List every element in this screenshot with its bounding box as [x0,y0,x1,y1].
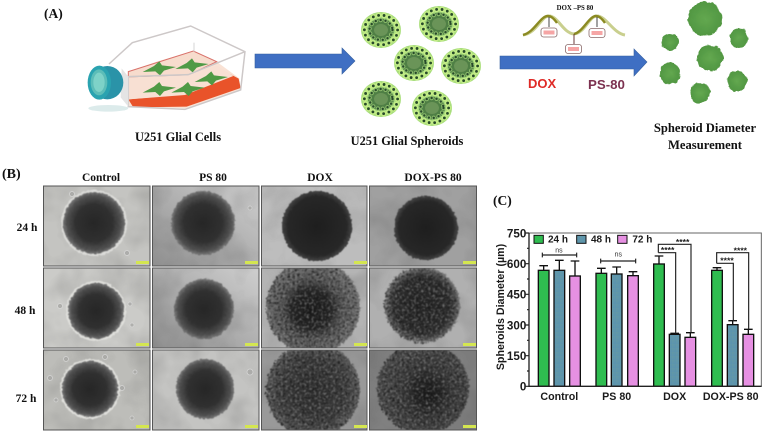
significance brackets [542,244,749,333]
error bars [539,256,753,337]
bars: 72 h [570,276,754,386]
column headers: DOX [307,172,333,184]
floating cells [48,192,253,420]
significance labels: **** [734,245,748,255]
column headers: Control [82,172,120,184]
y tick labels [507,227,526,394]
diagram: DOX-PS 80 conjugate [523,5,625,54]
y tick labels: 150 [507,350,526,363]
row headers: 72 h [16,393,37,405]
label: B: (B) [2,167,21,182]
row 48 h [66,279,234,341]
significance labels: ns [555,248,563,255]
y tick labels: 300 [507,319,526,332]
y tick labels: 750 [507,227,526,240]
significance labels: **** [720,256,734,266]
micrograph backgrounds [44,186,477,430]
column headers [82,172,462,184]
y tick labels: 450 [507,289,526,302]
caption: Spheroid Diameter Measurement: Spheroid Diameter [654,121,757,135]
significance labels: **** [676,237,690,247]
column headers: PS 80 [199,172,227,184]
bars: 24 h [538,264,722,386]
arrow: cells to spheroids [255,48,355,74]
panel: C bar chart [493,193,762,403]
arrow: treatment [500,49,647,76]
icon: measured spheroids [660,2,748,103]
panel: B micrographs [2,167,477,432]
plot frame [529,233,761,386]
diagram: DOX-PS 80 conjugate: DOX –PS 80 [557,5,594,12]
row headers: 48 h [15,305,36,317]
y ticks [526,233,529,386]
row headers: 24 h [17,222,38,234]
significance labels [555,237,748,266]
caption: Spheroid Diameter Measurement: Measurement [668,138,743,152]
row headers [15,222,38,405]
panel: A workflow [44,2,757,152]
x labels: PS 80 [602,391,631,403]
x labels: Control [540,391,578,403]
label: PS-80: PS-80 [588,77,625,92]
label: C: (C) [493,193,512,208]
row 72 h [60,359,234,419]
bars: 48 h [554,270,738,386]
x labels: DOX-PS 80 [703,391,759,403]
legend: 72 h [632,235,652,246]
icon: culture flask [88,26,245,112]
y tick labels: 0 [520,381,526,394]
significance labels: ns [615,251,623,258]
label: DOX: DOX [528,76,556,91]
row 24 h [61,190,458,261]
micrograph frames [44,186,476,430]
label: A: (A) [44,6,63,21]
row 48 h treated [264,268,462,348]
legend: 24 h [548,235,568,246]
y tick labels: 600 [507,258,526,271]
x labels [540,391,759,403]
caption: U251 Glial Cells: U251 Glial Cells [135,130,221,144]
legend: 48 h [591,235,611,246]
scale bars [136,261,476,428]
caption: U251 Glial Spheroids: U251 Glial Spheroids [351,134,464,148]
bar chart [495,227,762,403]
y axis title: Spheroids Diameter (µm) [495,243,507,370]
icon: spheroid cluster [361,6,481,126]
row 72 h treated [264,350,470,430]
legend [534,235,652,246]
x labels: DOX [663,391,687,403]
micrograph spheroids [48,190,469,432]
column headers: DOX-PS 80 [404,172,462,184]
axes [529,233,762,386]
significance labels: **** [661,245,675,255]
